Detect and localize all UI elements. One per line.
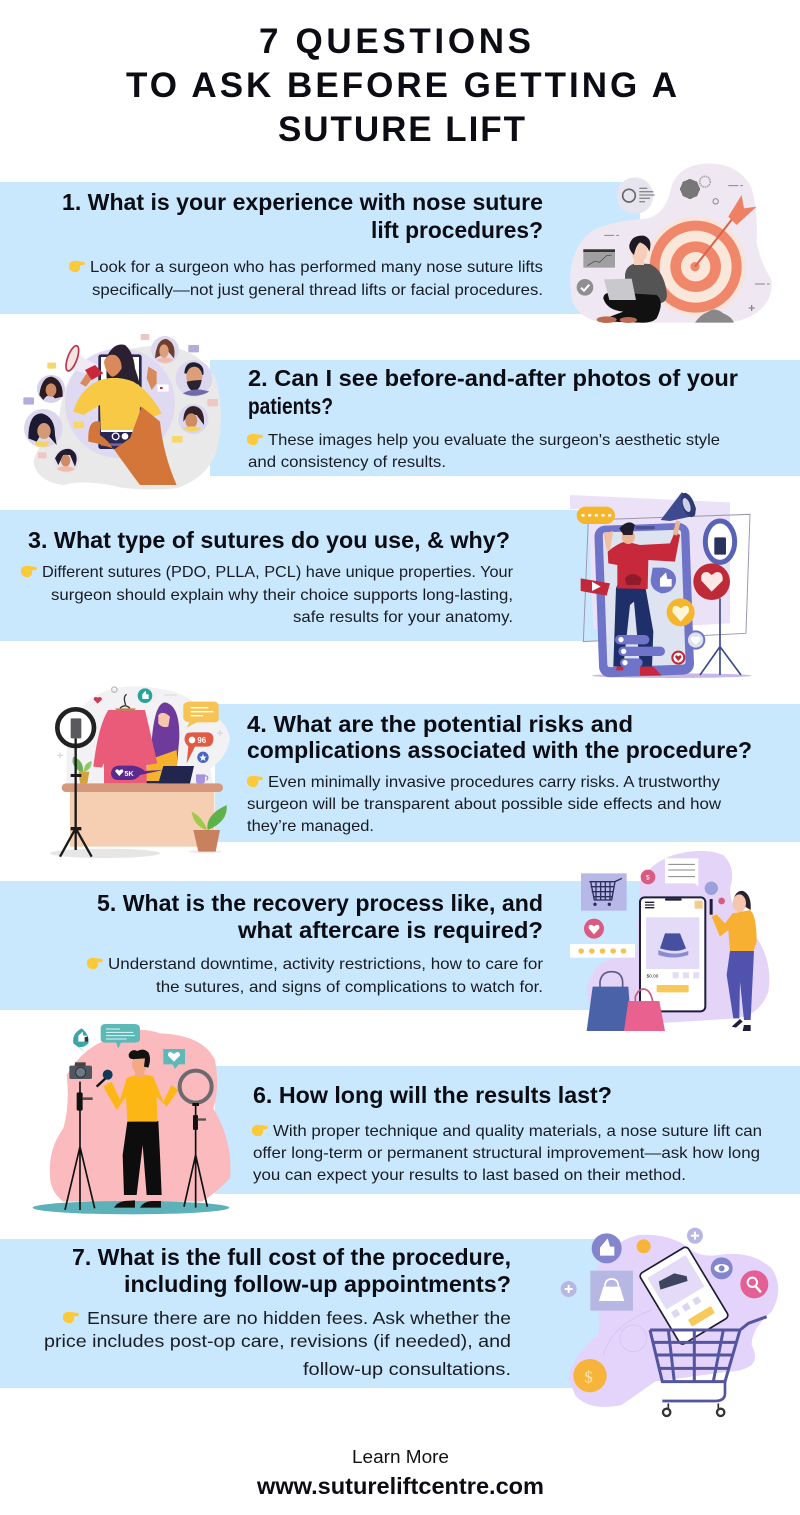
- text: question 5 answer: the sutures, and signs of complications to watch for.: [156, 979, 543, 996]
- heading: question 3: 3. What type of sutures do you use, & why?: [28, 527, 510, 553]
- text: question 3 answer: safe results for your anatomy.: [293, 609, 513, 626]
- footer: call to action: [256, 1447, 544, 1499]
- illustration: man in phone with megaphone: [570, 491, 752, 678]
- heading: question 5: what aftercare is required?: [237, 917, 543, 943]
- heading: question 2: patients?: [248, 393, 333, 419]
- illustration: presenter with camera and ring light: [33, 1024, 230, 1214]
- icon: pointing hand: [69, 261, 85, 272]
- text: question 3 answer: Different sutures (PDO, PLLA, PCL) have unique properties. Your: [42, 564, 514, 581]
- text: question 7 answer: follow-up consultations.: [303, 1359, 511, 1379]
- illustration: shopping cart with phone: $: [584, 1367, 593, 1386]
- text: question 4 answer: [247, 774, 721, 835]
- icon: pointing hand: [247, 776, 263, 787]
- title: [126, 22, 677, 149]
- heading: question 2: [248, 365, 738, 419]
- heading: question 5: [97, 890, 543, 943]
- text: question 1 answer: Look for a surgeon who has performed many nose suture lifts: [90, 259, 543, 276]
- heading: question 1: [62, 189, 543, 243]
- panel: question 6: [33, 1024, 800, 1214]
- text: question 6 answer: [253, 1123, 762, 1184]
- title: 7 QUESTIONS: [259, 22, 531, 61]
- heading: question 2: 2. Can I see before-and-after photos of your: [248, 365, 738, 391]
- panel: question 1: [0, 163, 772, 323]
- icon: pointing hand: [21, 566, 37, 577]
- text: question 5 answer: [108, 956, 544, 996]
- illustration: shopping cart with phone: [561, 1228, 778, 1416]
- heading: question 6: 6. How long will the results last?: [253, 1082, 612, 1108]
- text: question 4 answer: they’re managed.: [247, 818, 374, 835]
- heading: question 4: 4. What are the potential risks and: [247, 711, 633, 737]
- panel: question 3: [0, 491, 752, 678]
- icon: pointing hand: [63, 1312, 79, 1323]
- illustration: online shopping on phone: $: [646, 874, 650, 881]
- text: question 3 answer: surgeon should explain why their choice supports long-lasting,: [51, 587, 513, 604]
- panel: question 2: [23, 334, 800, 489]
- text: question 5 answer: Understand downtime, activity restrictions, how to care for: [108, 956, 544, 973]
- illustration: seller filming clothing at desk: 96: [197, 736, 207, 745]
- icon: pointing hand: [252, 1125, 268, 1136]
- text: question 7 answer: [44, 1308, 511, 1379]
- heading: question 4: [247, 711, 752, 763]
- icon: pointing hand: [247, 434, 263, 445]
- heading: question 4: complications associated with the procedure?: [247, 737, 752, 763]
- text: question 1 answer: specifically—not just general thread lifts or facial procedures.: [92, 282, 543, 299]
- text: question 4 answer: Even minimally invasive procedures carry risks. A trustworthy: [268, 774, 720, 791]
- panel: question 5: [0, 851, 769, 1031]
- panel: question 4: [50, 686, 800, 858]
- illustration: online shopping on phone: $0.00: [647, 974, 659, 979]
- text: question 2 answer: and consistency of results.: [248, 454, 446, 471]
- text: question 2 answer: These images help you evaluate the surgeon's aesthetic style: [268, 432, 720, 449]
- illustration: seller filming clothing at desk: [50, 686, 230, 858]
- text: question 6 answer: you can expect your results to last based on their method.: [253, 1167, 686, 1184]
- illustration: online shopping on phone: [570, 851, 769, 1031]
- text: question 6 answer: offer long-term or permanent structural improvement—ask how long: [253, 1145, 760, 1162]
- icon: pointing hand: [87, 958, 103, 969]
- heading: question 5: 5. What is the recovery process like, and: [97, 890, 543, 916]
- text: question 4 answer: surgeon will be transparent about possible side effects and how: [247, 796, 721, 813]
- illustration: seller filming clothing at desk: 5K: [124, 769, 134, 778]
- footer: call to action: Learn More: [352, 1447, 449, 1467]
- heading: question 7: [72, 1244, 511, 1297]
- text: question 3 answer: [42, 564, 514, 626]
- text: question 2 answer: [248, 432, 720, 471]
- heading: question 1: lift procedures?: [371, 217, 543, 243]
- illustration: influencer on phone with followers: [23, 334, 221, 489]
- heading: question 7: including follow-up appointments?: [124, 1271, 511, 1297]
- heading: question 7: 7. What is the full cost of the procedure,: [72, 1244, 511, 1270]
- footer: call to action: www.sutureliftcentre.com: [256, 1473, 544, 1499]
- text: question 7 answer: Ensure there are no hidden fees. Ask whether the: [87, 1308, 511, 1328]
- illustration: man with laptop and target: [570, 163, 772, 323]
- text: question 1 answer: [90, 259, 543, 299]
- text: question 7 answer: price includes post-op care, revisions (if needed), and: [44, 1331, 511, 1351]
- title: TO ASK BEFORE GETTING A: [126, 66, 677, 105]
- text: question 6 answer: With proper technique and quality materials, a nose suture lift can: [273, 1123, 762, 1140]
- panel: question 7: [0, 1228, 778, 1416]
- title: SUTURE LIFT: [278, 110, 525, 149]
- heading: question 1: 1. What is your experience with nose suture: [62, 189, 543, 215]
